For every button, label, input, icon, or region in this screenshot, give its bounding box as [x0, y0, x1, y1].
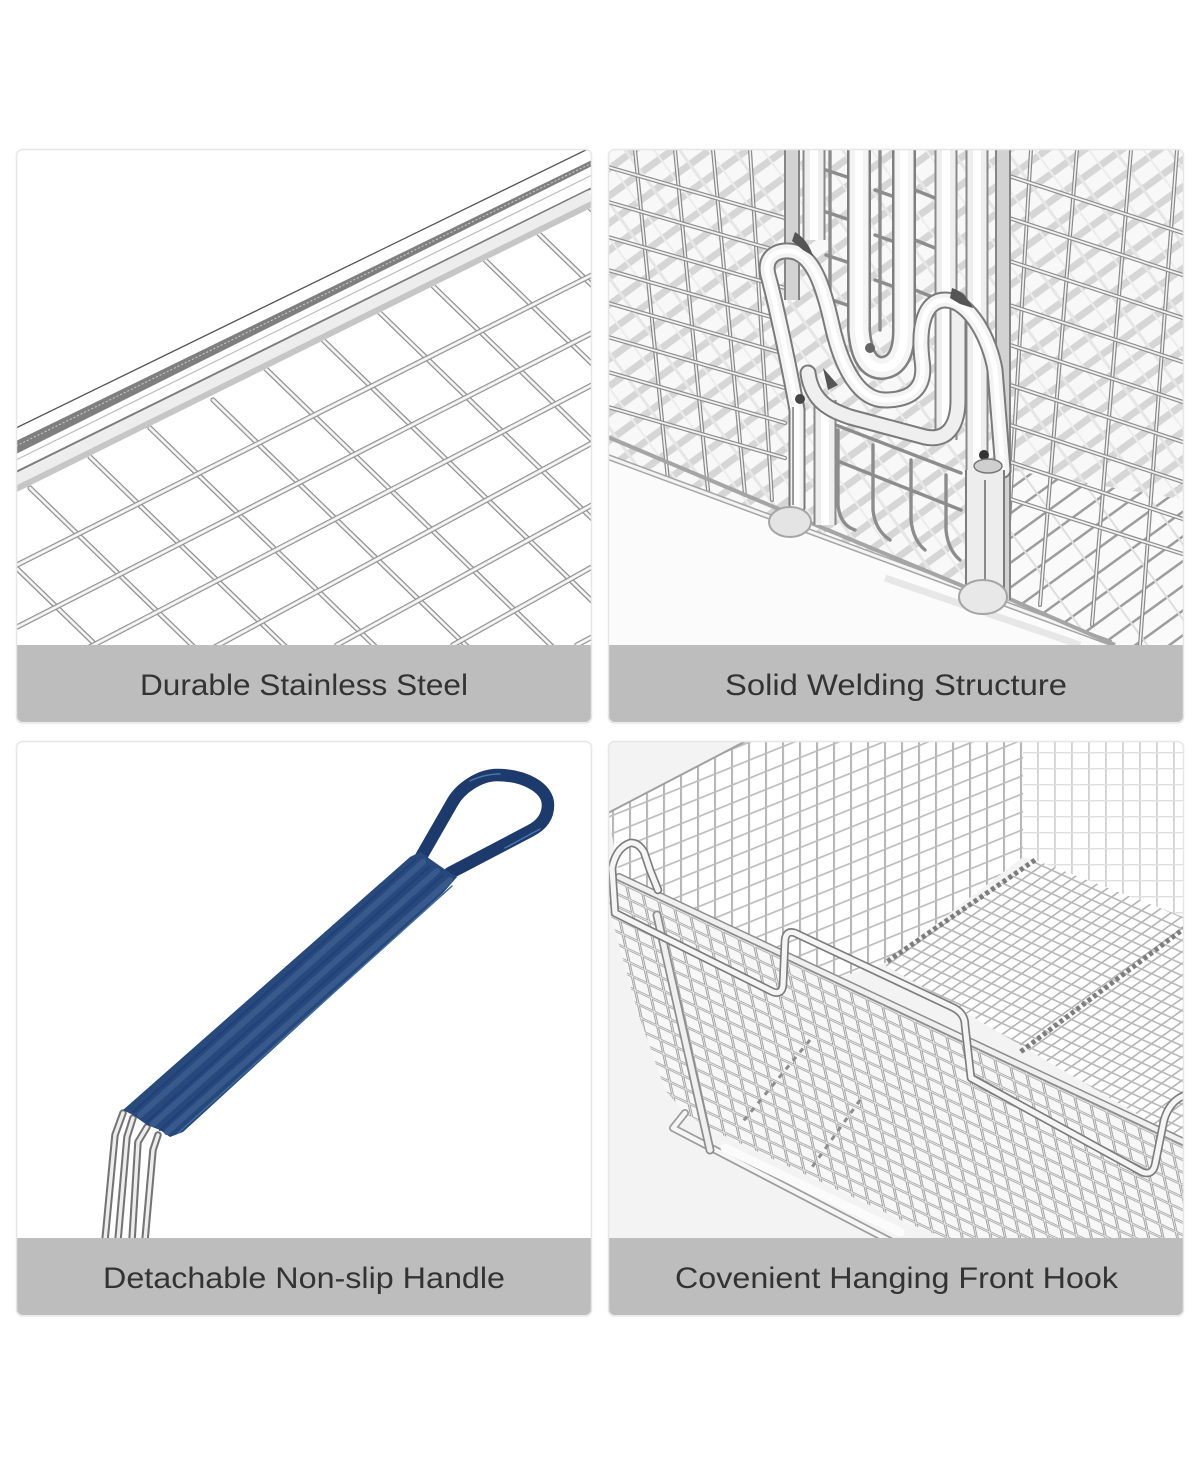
tube: inner U bend [859, 150, 904, 368]
caption bar [17, 1238, 591, 1316]
lower rim with hooks [612, 843, 1186, 1173]
weld spots [769, 232, 1007, 614]
photo: blue handle loop [421, 774, 548, 873]
photo: welded hooks on mesh [608, 150, 1186, 645]
panel: durable stainless steel [17, 150, 591, 722]
back right wall mesh [1023, 741, 1186, 925]
caption text: Covenient Hanging Front Hook [675, 1262, 1119, 1295]
panel: solid welding structure [608, 150, 1186, 723]
caption text: Durable Stainless Steel [140, 669, 468, 702]
caption bar [609, 645, 1183, 723]
photo: wire grid close-up [17, 150, 591, 645]
panel: convenient hanging front hook [608, 741, 1186, 1316]
photo: wire legs [105, 1113, 158, 1240]
card outlines [16, 150, 1184, 1316]
tubes: vertical frame [792, 150, 1003, 600]
mesh: centre section [815, 150, 961, 560]
upper rim wire [619, 877, 1186, 1143]
base rails [608, 437, 1115, 645]
caption text: Detachable Non-slip Handle [103, 1262, 505, 1295]
panel: detachable non-slip handle [17, 742, 591, 1316]
photo: blue handle grip [123, 852, 457, 1137]
base frame [673, 1113, 900, 1242]
basket floor mesh [885, 860, 1186, 1143]
tube: lower right legs [793, 407, 985, 590]
tube: hook wires [767, 251, 1003, 507]
photo: basket [608, 741, 1186, 1242]
caption bar [609, 1238, 1183, 1316]
leg bar [657, 915, 710, 1150]
caption text: Solid Welding Structure [725, 669, 1067, 702]
front mesh [608, 877, 1186, 1238]
caption bar [17, 645, 591, 723]
back left wall mesh [608, 741, 1023, 990]
